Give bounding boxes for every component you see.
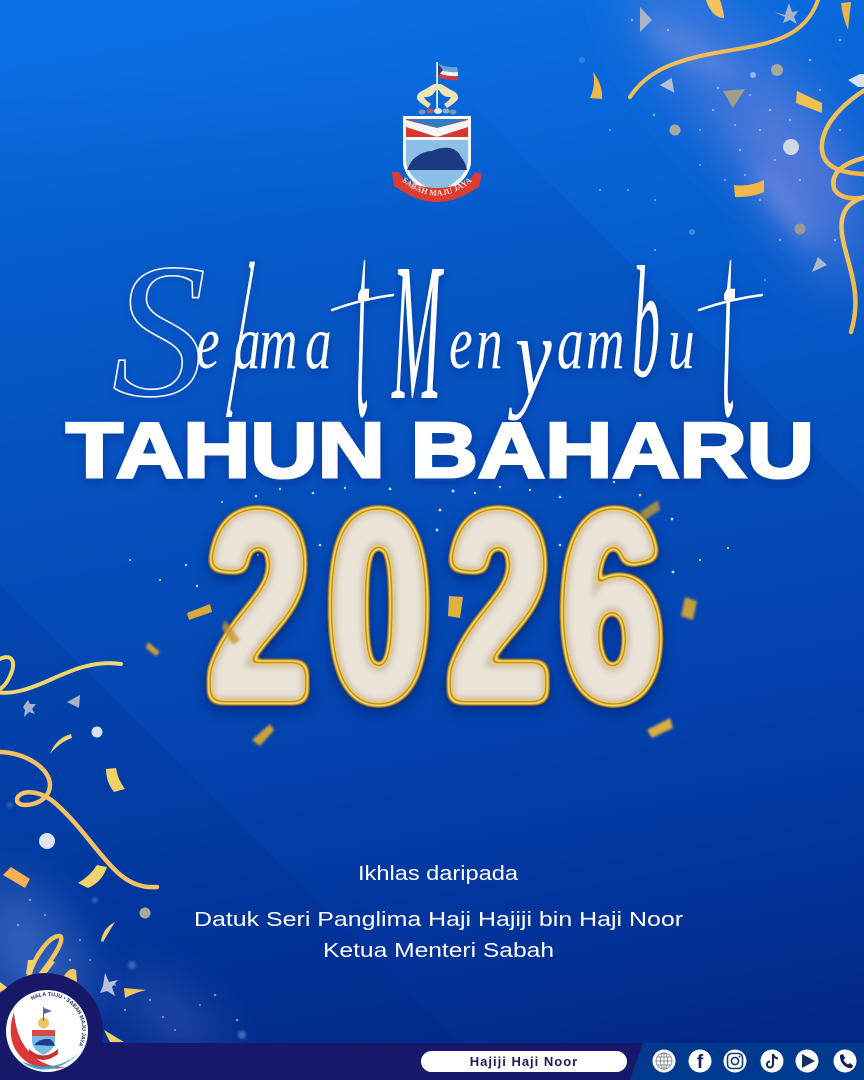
- script heading: e: [449, 302, 473, 385]
- streamer: left middle: [0, 752, 157, 887]
- streamer: right edge: [822, 88, 864, 332]
- script heading: y: [508, 291, 552, 422]
- arms holding flag: [417, 84, 458, 108]
- emblem: Sabah coat of arms: [392, 62, 482, 202]
- script heading: m: [259, 302, 297, 385]
- icon: facebook: [688, 1050, 712, 1073]
- footer bar: [0, 1043, 864, 1080]
- streamer: top right: [630, 0, 818, 97]
- script heading: a: [234, 302, 261, 385]
- social icons: [652, 1050, 856, 1073]
- icon: tiktok: [760, 1050, 784, 1072]
- script heading: m: [586, 302, 624, 385]
- script heading: b: [632, 233, 660, 411]
- pearls: [418, 108, 456, 114]
- heading: TAHUN BAHARU: TAHUN BAHARU: [66, 406, 814, 494]
- icon: globe: [652, 1050, 676, 1072]
- starfield bottom left: [7, 802, 246, 1039]
- icon: phone: [834, 1050, 856, 1072]
- flag: [436, 62, 458, 108]
- position: Ketua Menteri Sabah: [323, 940, 554, 962]
- badge: Hala Tuju Sabah Maju Jaya: [0, 973, 103, 1072]
- footer name pill: [421, 1051, 627, 1072]
- script heading: t: [356, 171, 369, 475]
- starfield top right: [579, 19, 851, 291]
- script heading: t: [722, 171, 735, 475]
- confetti around year: [146, 500, 697, 746]
- script heading: u: [668, 302, 695, 385]
- ribbon: SABAH MAJU JAYA: [402, 178, 472, 196]
- shield: [403, 116, 471, 197]
- streamer: left lower: [28, 936, 61, 978]
- year number: 2026: 6: [562, 458, 661, 753]
- mini crest: [29, 1007, 58, 1060]
- name: Datuk Seri Panglima Haji Hajiji bin Haji Noor: [194, 909, 683, 931]
- script heading: n: [476, 302, 503, 385]
- badge ring lettering: HALA TUJU • SABAH MAJU JAYA: [30, 992, 86, 1046]
- footer name pill: Hajiji Haji Noor: [470, 1054, 578, 1069]
- closing text block: [194, 863, 683, 962]
- year number: 2026: 2: [449, 458, 548, 753]
- sender line: Ikhlas daripada: [358, 863, 519, 885]
- icon: instagram: [724, 1050, 746, 1072]
- confetti: left: [0, 695, 150, 1042]
- year number: 2026: 2: [209, 458, 308, 753]
- script heading: e: [196, 302, 220, 385]
- icon: facebook: f: [697, 1052, 704, 1073]
- script heading: a: [557, 302, 584, 385]
- glitter dots behind year: [129, 481, 729, 611]
- streamer: left upper: [0, 657, 121, 693]
- script heading: l: [217, 219, 262, 467]
- script heading: a: [305, 302, 332, 385]
- year number: 2026: 0: [329, 458, 429, 753]
- confetti: top right: [590, 0, 864, 272]
- icon: video play: [796, 1050, 818, 1072]
- script heading: M: [391, 223, 444, 441]
- script heading: S: [112, 225, 206, 437]
- year number: 2026: [209, 458, 661, 753]
- script heading: [112, 171, 762, 475]
